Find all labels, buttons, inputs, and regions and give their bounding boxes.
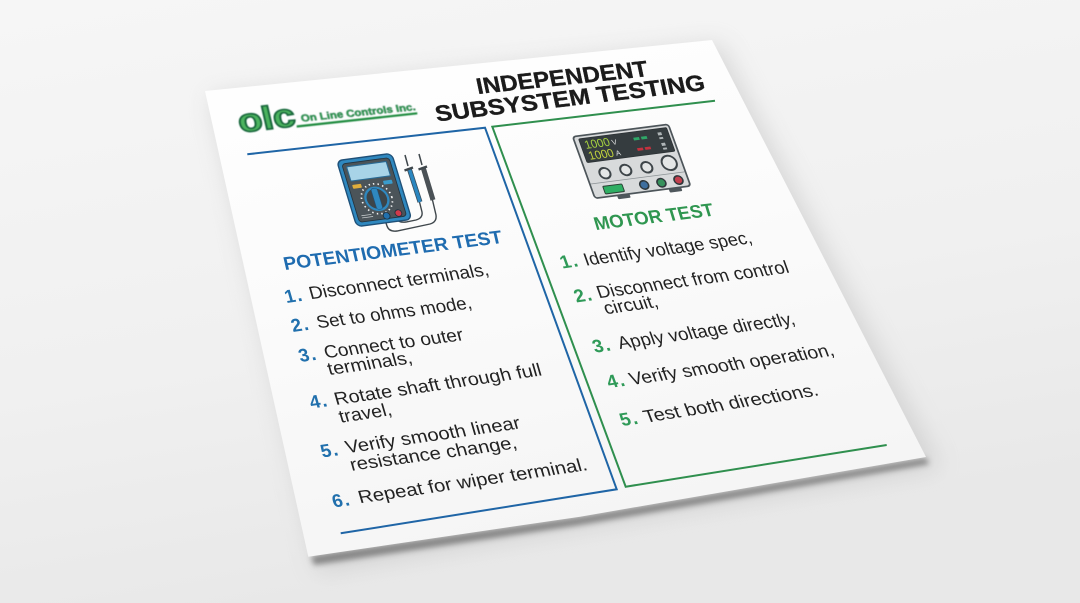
step 4: Rotate shaft through full: [332, 360, 544, 409]
display readouts: 1000: [582, 135, 612, 152]
step 3: Apply voltage directly,: [614, 309, 798, 353]
step 2: 2.: [288, 313, 312, 336]
display readouts: V: [610, 138, 618, 147]
title line 2: SUBSYSTEM TESTING: [433, 70, 707, 126]
step 1: Disconnect terminals,: [306, 260, 491, 303]
step 2: [571, 257, 792, 318]
display readouts: [582, 134, 623, 163]
step 4: Verify smooth operation,: [626, 340, 837, 389]
display readouts: 1000: [586, 146, 616, 163]
step 3: [296, 325, 466, 379]
multimeter screen: [347, 161, 391, 181]
step 4: 4.: [603, 369, 629, 392]
title: [433, 56, 707, 126]
step 5: Verify smooth linear: [343, 413, 523, 457]
probe: black: [418, 154, 433, 200]
step 5: Test both directions.: [640, 380, 821, 426]
paper sheet: [205, 40, 926, 557]
title line 1: INDEPENDENT: [474, 56, 650, 99]
logo name: On Line Controls Inc.: [300, 102, 417, 125]
step 2: 2.: [571, 284, 596, 306]
multimeter jacks: [382, 209, 403, 220]
icon: bench power supply: [573, 124, 692, 202]
heading: motor test: MOTOR TEST: [591, 199, 717, 234]
step 5: resistance change,: [347, 433, 519, 475]
step 6: 6.: [329, 489, 353, 511]
step 5: [318, 413, 523, 475]
display readouts: A: [614, 148, 622, 158]
icon: multimeter: [337, 153, 436, 231]
step 4: travel,: [336, 400, 394, 427]
step 4: [307, 360, 544, 427]
heading: potentiometer test: POTENTIOMETER TEST: [281, 226, 505, 274]
step 5: 5.: [616, 407, 642, 430]
output terminals: [638, 175, 684, 190]
panel: motor test: [492, 101, 887, 487]
multimeter buttons: [352, 180, 393, 189]
step 2: circuit,: [600, 292, 661, 318]
panel outline: green: [492, 101, 887, 487]
logo: On Line Controls Inc.: [234, 98, 417, 140]
step 3: Connect to outer: [321, 325, 466, 362]
logo mark: olc: [234, 98, 299, 140]
multimeter leads: [385, 198, 436, 231]
power button: [603, 184, 625, 194]
probe: blue: [404, 155, 420, 202]
step 2: Set to ohms mode,: [314, 293, 474, 332]
list: potentiometer steps: [282, 260, 590, 511]
knobs: [596, 155, 679, 179]
step 3: terminals,: [325, 348, 415, 379]
step 3: 3.: [296, 343, 320, 366]
panel: potentiometer test: [247, 128, 617, 533]
supply feet: [617, 186, 682, 199]
step 3: 3.: [589, 334, 615, 357]
multimeter dial: [358, 182, 396, 216]
step 1: 1.: [282, 284, 306, 307]
paper shadow: [210, 44, 940, 572]
panel outline: blue: [247, 128, 617, 533]
step 1: 1.: [557, 250, 582, 272]
step 1: Identify voltage spec,: [581, 228, 755, 270]
step 2: Disconnect from control: [594, 257, 792, 302]
status lights: [632, 132, 667, 153]
step 6: Repeat for wiper terminal.: [355, 455, 590, 507]
logo underline: [297, 113, 417, 126]
multimeter body: [337, 153, 412, 227]
supply display: [579, 128, 675, 163]
step 6: [329, 455, 590, 511]
list: motor steps: [557, 228, 837, 430]
supply body: [573, 124, 691, 198]
step 4: 4.: [307, 390, 331, 412]
step 5: 5.: [318, 439, 342, 461]
